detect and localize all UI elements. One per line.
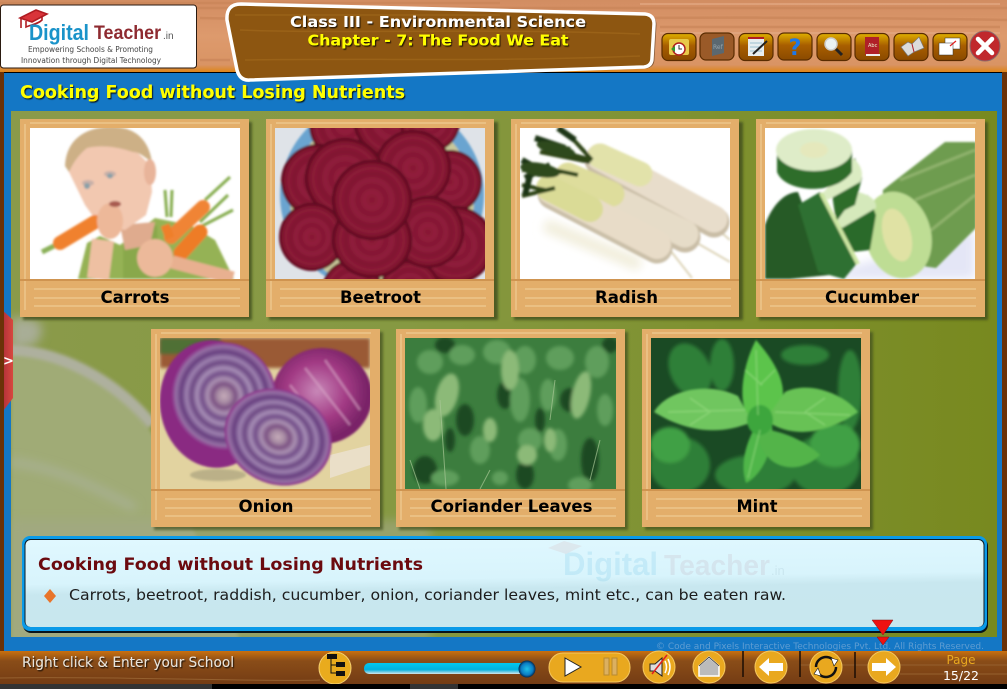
school prompt: Right click & Enter your School [22, 655, 234, 671]
icon: dictionary: Abc [868, 43, 878, 49]
label: beetroot: Beetroot [340, 288, 421, 308]
info body text: Carrots, beetroot, raddish, cucumber, onion, coriander leaves, mint etc., can be eaten raw. [69, 586, 786, 604]
card: coriander leaves [396, 329, 628, 530]
card: cucumber [756, 119, 988, 320]
red next-page pointer arrow [872, 620, 893, 645]
logo tagline: Empowering Schools & Promoting [28, 45, 153, 54]
bottom control bar [0, 651, 1007, 684]
button: next [868, 651, 900, 683]
photo: beetroot slices [275, 128, 485, 279]
bottom screen edge [0, 684, 1007, 689]
logo wordmark: Digital [29, 20, 89, 45]
button: home [693, 651, 725, 683]
icon: question mark: ? [789, 36, 801, 61]
label: radish: Radish [595, 288, 658, 308]
page counter: Page [946, 653, 976, 667]
photo: boy with carrots [30, 128, 240, 279]
label: coriander leaves: Coriander Leaves [430, 497, 592, 517]
card: mint [642, 329, 873, 530]
icon: orange bullet [44, 589, 56, 603]
label: cucumber: Cucumber [825, 288, 920, 308]
left red side tab [0, 308, 14, 415]
logo wordmark: Teacher [94, 23, 162, 44]
information box [22, 536, 988, 633]
left red side tab: > [3, 354, 14, 369]
icon: history clock [669, 39, 689, 55]
watermark logo [548, 541, 785, 582]
card: onion [151, 327, 383, 530]
olive background panel [11, 111, 997, 640]
button: previous [755, 651, 787, 683]
copyright line: © Code and Pixels Interactive Technologies Pvt. Ltd. All Rights Reserved. [656, 642, 984, 652]
icon: notepad [748, 37, 767, 56]
icon: magnifier [825, 38, 842, 55]
label: mint: Mint [736, 497, 778, 517]
toolbar separators [743, 651, 855, 678]
card: carrots [20, 119, 252, 320]
logo wordmark: .in [163, 31, 174, 42]
page heading: Cooking Food without Losing Nutrients [20, 82, 405, 103]
icon: reference book: Ref [713, 44, 724, 51]
label: onion: Onion [238, 497, 294, 517]
play and pause control [549, 653, 630, 682]
title text: Chapter - 7: The Food We Eat [308, 32, 569, 50]
button: replay [810, 651, 842, 683]
page counter [943, 653, 979, 683]
logo panel [0, 5, 196, 68]
label: carrots: Carrots [100, 288, 170, 308]
photo: white radishes [520, 128, 730, 279]
icon: window restore [939, 38, 960, 55]
icon: open book [901, 37, 924, 56]
watermark logo: Digital [563, 546, 658, 582]
wooden header bar [0, 0, 1007, 72]
title text [290, 13, 586, 50]
progress slider [364, 660, 536, 678]
card: radish [511, 119, 743, 320]
icon: graduation cap [20, 10, 47, 28]
photo: coriander leaves [405, 338, 616, 489]
photo: mint leaves [651, 338, 861, 489]
button: contents tree [319, 652, 351, 684]
logo tagline [21, 45, 162, 65]
info heading: Cooking Food without Losing Nutrients [38, 555, 423, 575]
chapter title banner [227, 4, 656, 81]
photo: red onions [160, 338, 370, 489]
photo: cucumber slices [765, 128, 975, 279]
watermark logo: Teacher [664, 550, 770, 582]
icon: dictionary [865, 37, 880, 56]
page counter: 15/22 [943, 668, 979, 683]
watermark logo: .in [771, 563, 785, 578]
logo wordmark [29, 20, 174, 45]
card: beetroot [266, 76, 498, 320]
logo tagline: Innovation through Digital Technology [21, 56, 162, 65]
icon: reference book [712, 36, 724, 56]
button: sound off [643, 651, 675, 683]
icon: close button [970, 31, 1000, 61]
toolbar buttons [662, 31, 1000, 61]
title text: Class III - Environmental Science [290, 13, 586, 31]
